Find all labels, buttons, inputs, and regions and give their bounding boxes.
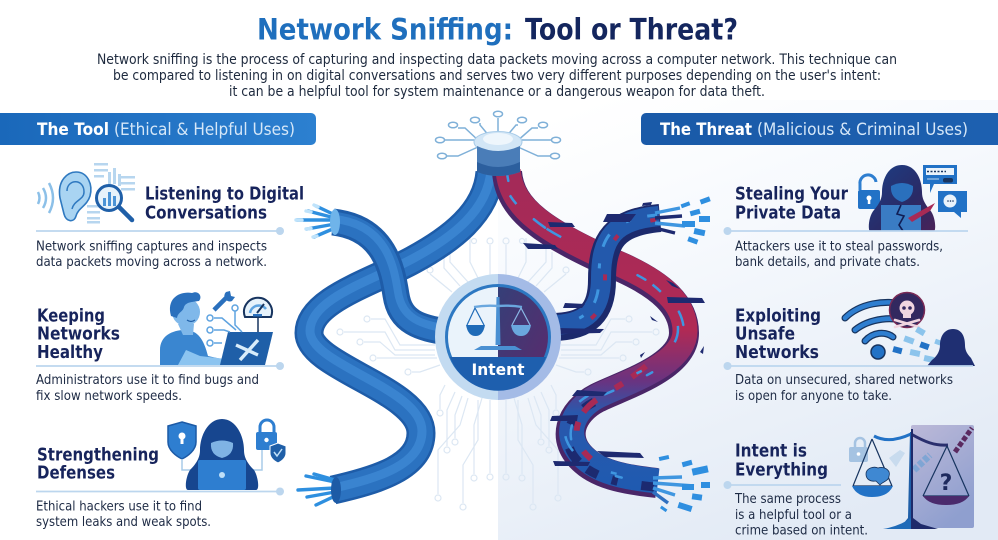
- left item 3: strengthening defenses: Strengthening: [37, 446, 159, 466]
- cable: helpful, upper strand: [333, 219, 449, 332]
- right item 3: intent is everything: is a helpful tool or a: [735, 507, 852, 523]
- hub collar: [477, 146, 520, 176]
- right item 2: exploiting networks: is open for anyone to take.: [735, 388, 892, 404]
- network hub with traces: [436, 111, 560, 159]
- left item 2: keeping networks healthy: [36, 291, 284, 404]
- right item 2: exploiting networks: Data on unsecured, shared networks: [735, 372, 953, 388]
- intro text: Network sniffing is the process of capturing and inspecting data packets moving across a computer network. This technique can: [97, 52, 897, 68]
- left item 2: keeping networks healthy: Networks: [37, 324, 120, 344]
- right item 3: intent is everything: Everything: [735, 460, 828, 480]
- top left fibres: [296, 205, 340, 237]
- title: Network Sniffing:: [257, 12, 513, 46]
- left item 2: keeping networks healthy: fix slow network speeds.: [36, 388, 182, 404]
- icon: admin at laptop: [160, 291, 273, 365]
- icon: ear and magnifier: [38, 163, 135, 224]
- cable: helpful, lower strand: [309, 170, 491, 490]
- left item 2: keeping networks healthy: Healthy: [37, 343, 104, 363]
- left item 1: listening: Network sniffing captures and inspects: [36, 238, 267, 254]
- left item 1: listening: data packets moving across a network.: [36, 254, 267, 270]
- title: Tool or Threat?: [525, 12, 738, 46]
- cable: threat, short strand: [545, 215, 663, 328]
- panel header: The Tool: (Ethical & Helpful Uses): [114, 120, 295, 139]
- top right frayed fibres: [655, 196, 711, 245]
- intro text: [97, 52, 897, 100]
- icon: divided scale: ?: [940, 471, 952, 496]
- right item 3: intent is everything: crime based on intent.: [735, 522, 868, 538]
- cable: threat, long strand: [501, 168, 685, 487]
- right item 2: exploiting networks: [724, 292, 975, 404]
- left item 3: strengthening defenses: [36, 419, 286, 530]
- left item 1: listening: Listening to Digital: [145, 184, 304, 204]
- right item 1: stealing data: Attackers use it to steal passwords,: [735, 238, 943, 254]
- left item 2: keeping networks healthy: Administrators use it to find bugs and: [36, 372, 259, 388]
- icon: ethical hacker with shield and lock: [168, 419, 286, 490]
- panel header: The Threat: The Threat: [660, 120, 752, 139]
- right item 1: stealing data: [724, 165, 968, 270]
- panel header: The Threat: [641, 113, 998, 145]
- icon: divided scale: [849, 425, 974, 529]
- title: [257, 12, 738, 46]
- right item 3: intent is everything: The same process: [734, 491, 841, 507]
- intro text: be compared to listening in on digital conversations and serves two very different purposes depending on the user's intent:: [113, 68, 881, 84]
- panel header: The Tool: The Tool: [37, 120, 109, 139]
- icon: balance scale: [466, 297, 531, 350]
- right item 1: stealing data: bank details, and private chats.: [735, 254, 920, 270]
- intro text: it can be a helpful tool for system maintenance or a dangerous weapon for data theft.: [229, 84, 765, 100]
- icon: attacker with open lock and chats: [858, 165, 967, 231]
- left item 3: strengthening defenses: Ethical hackers use it to find: [36, 498, 202, 514]
- intent medallion: Intent: [472, 360, 525, 379]
- bottom right frayed fibres: [653, 455, 710, 512]
- intent medallion: [435, 274, 561, 400]
- right item 2: exploiting networks: Exploiting: [735, 306, 821, 326]
- right item 1: stealing data: Stealing Your: [735, 184, 848, 204]
- left item 1: listening: [36, 163, 304, 270]
- right item 3: intent is everything: Intent is: [735, 442, 807, 462]
- panel header: The Threat: (Malicious & Criminal Uses): [757, 120, 968, 139]
- panel header: The Tool: [0, 113, 316, 145]
- bottom left fibres: [298, 474, 341, 505]
- cable glitch fragments: [523, 202, 705, 466]
- right item 2: exploiting networks: Networks: [735, 343, 819, 363]
- left item 1: listening: Conversations: [145, 204, 267, 224]
- right item 1: stealing data: Private Data: [735, 204, 841, 224]
- left item 2: keeping networks healthy: Keeping: [37, 306, 105, 326]
- icon: wifi with skull and lurker: [845, 292, 975, 366]
- circuit board traces: [337, 238, 659, 510]
- right item 2: exploiting networks: Unsafe: [735, 324, 795, 344]
- left item 3: strengthening defenses: Defenses: [37, 464, 115, 484]
- left item 3: strengthening defenses: system leaks and weak spots.: [36, 514, 211, 530]
- right item 3: intent is everything: [724, 425, 974, 538]
